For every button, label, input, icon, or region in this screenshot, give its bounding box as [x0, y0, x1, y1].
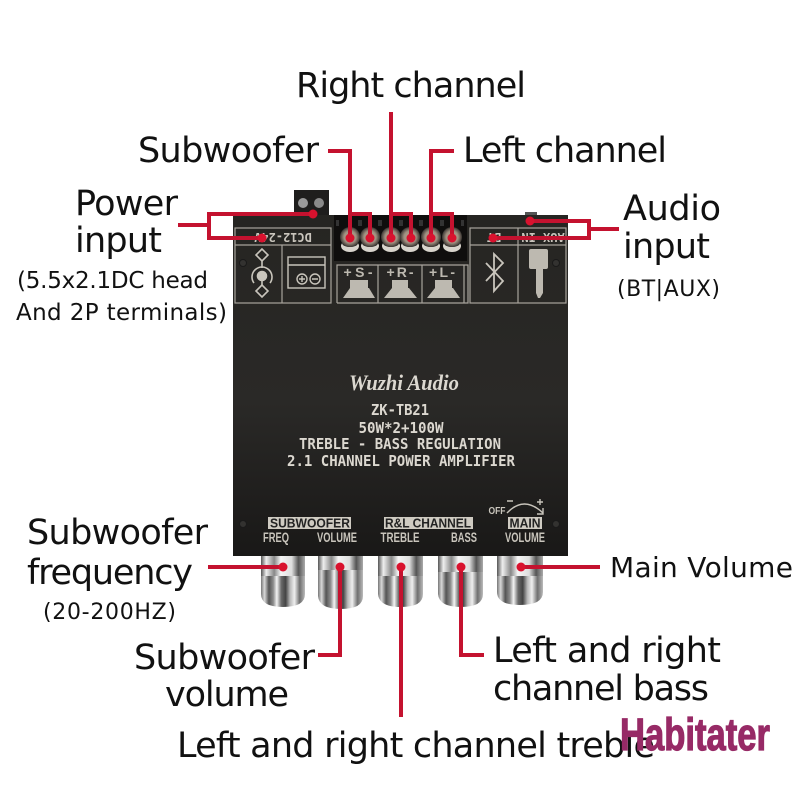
control labels: MAIN — [510, 516, 540, 530]
label: subwoofer volume: volume — [165, 675, 289, 715]
label: channel bass — [493, 631, 721, 709]
label: power input note: (5.5x2.1DC head — [17, 268, 208, 294]
red callout dots — [258, 210, 534, 572]
red callout lines — [178, 112, 619, 717]
label: left channel: Left channel — [463, 131, 667, 171]
label: channel bass: channel bass — [493, 669, 709, 709]
control labels: VOLUME — [505, 530, 545, 545]
power terminal block — [294, 190, 329, 216]
icon: speakers: +R- — [386, 264, 414, 280]
label: audio input — [623, 189, 721, 267]
top silkscreen labels: DC12-24V — [254, 230, 312, 244]
control labels: FREQ — [263, 530, 289, 545]
speaker binding posts — [336, 220, 464, 252]
label: audio input: input — [623, 227, 710, 267]
icon: volume arc — [507, 499, 543, 514]
label: power input — [75, 184, 179, 261]
control labels: OFF — [488, 506, 506, 517]
icon: speakers: +L- — [429, 264, 455, 280]
amplifier board — [233, 212, 568, 556]
label: frequency range: (20-200HZ) — [43, 600, 176, 625]
icon: speakers: +S- — [344, 264, 373, 280]
label: subwoofer frequency: frequency — [27, 553, 193, 593]
label: power input: input — [75, 221, 162, 261]
screws — [240, 260, 560, 528]
label: subwoofer: Subwoofer — [138, 131, 320, 171]
control labels: R&L CHANNEL — [385, 516, 471, 530]
label: subwoofer frequency — [27, 513, 209, 593]
control labels — [263, 506, 545, 545]
label: right channel: Right channel — [296, 66, 526, 106]
label: BT AUX: (BT|AUX) — [617, 277, 720, 302]
label: subwoofer frequency: Subwoofer — [27, 513, 209, 553]
brand text block: TREBLE - BASS REGULATION — [299, 435, 501, 453]
label: subwoofer volume: Subwoofer — [134, 638, 316, 678]
icon: audio jack — [529, 249, 548, 298]
icon: DC jack — [252, 249, 272, 297]
top silkscreen labels: AUX IN — [521, 230, 565, 244]
control labels: SUBWOOFER — [270, 516, 350, 530]
label: subwoofer volume — [134, 638, 316, 715]
brand text block: 50W*2+100W — [358, 419, 444, 437]
top silkscreen labels — [254, 230, 565, 244]
brand text block: Wuzhi Audio — [349, 370, 459, 395]
control labels: TREBLE — [380, 530, 420, 545]
label: power input note: And 2P terminals) — [16, 300, 227, 326]
knobs — [261, 556, 543, 609]
silkscreen frame — [235, 228, 566, 303]
brand text block — [287, 370, 516, 470]
control labels: VOLUME — [317, 530, 357, 545]
label: audio input: Audio — [623, 189, 721, 229]
control labels: BASS — [451, 530, 477, 545]
brand text block: 2.1 CHANNEL POWER AMPLIFIER — [287, 452, 516, 470]
top silkscreen labels: BT — [487, 230, 501, 244]
label: power input: Power — [75, 184, 179, 224]
label: channel bass: Left and right — [493, 631, 721, 671]
icon: bluetooth — [486, 254, 503, 291]
icon: 2P terminal — [288, 257, 325, 288]
label: power input note — [16, 268, 227, 326]
label: channel treble: Left and right channel treble — [177, 726, 655, 766]
icon: speakers — [343, 264, 460, 298]
label: main volume: Main Volume — [610, 551, 793, 584]
brand text block: ZK-TB21 — [371, 401, 429, 419]
